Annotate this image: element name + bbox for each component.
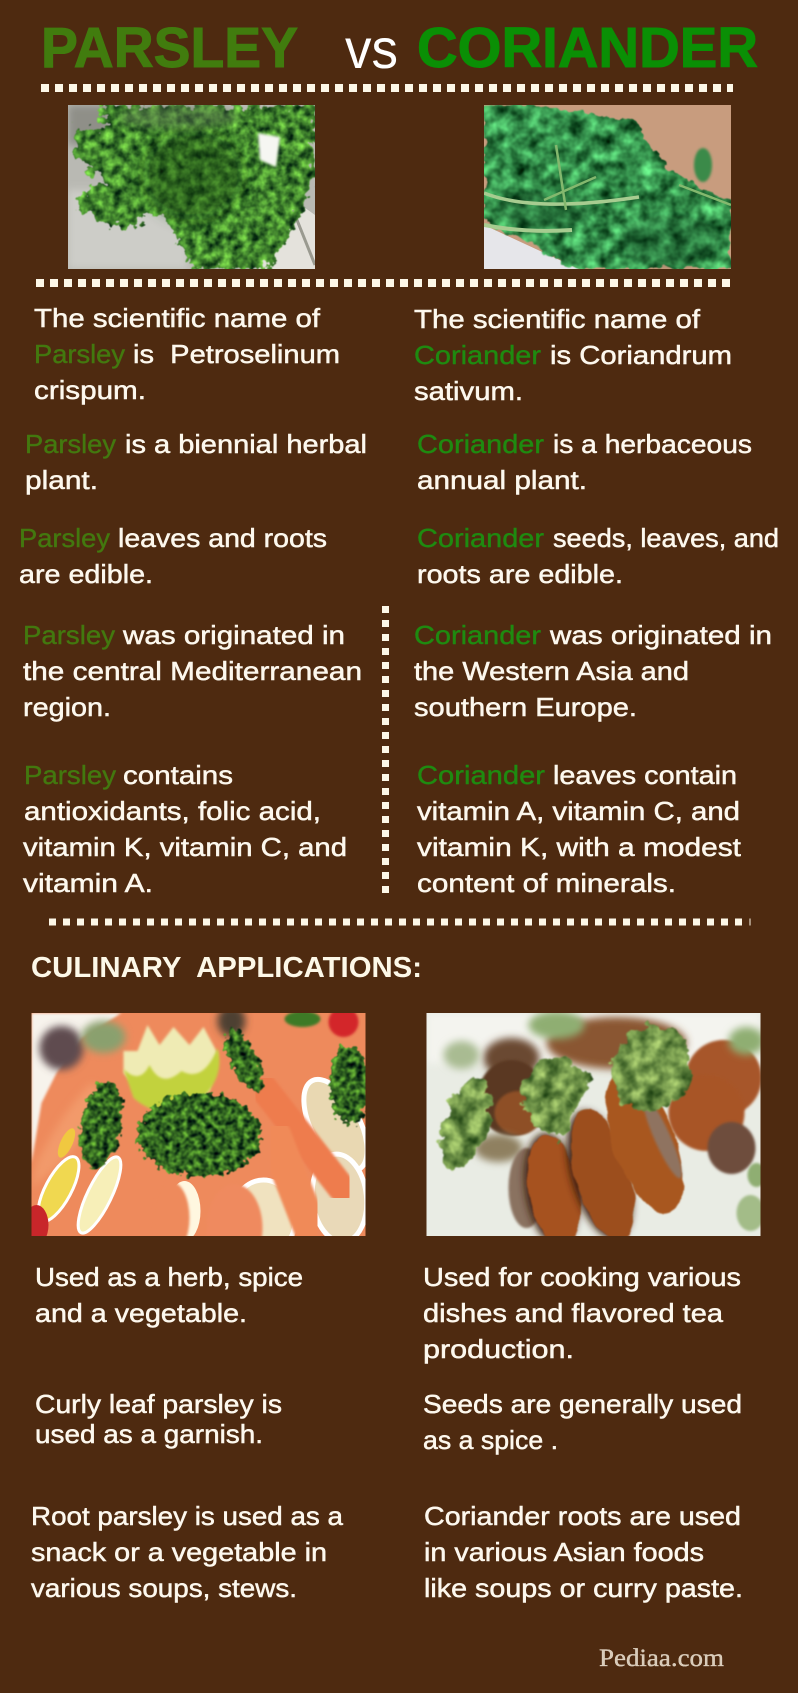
fact: coriander annual	[417, 429, 752, 495]
fact: coriander scientific name: Coriander	[414, 340, 541, 370]
use: garnish: used as a garnish.	[35, 1419, 263, 1449]
photo: glazed chicken with coriander	[426, 1011, 766, 1250]
fact: coriander nutrients	[417, 760, 742, 898]
fact: coriander nutrients: vitamin K, with a modest	[417, 832, 742, 862]
fact: coriander nutrients: content of minerals.	[417, 868, 676, 898]
fact: coriander origin: the Western Asia and	[414, 656, 689, 686]
use: herb, spice, vegetable	[35, 1262, 303, 1328]
fact: coriander origin: was originated in	[549, 620, 772, 650]
fact: parsley origin	[23, 620, 362, 722]
use: cooking and tea: dishes and flavored tea	[423, 1298, 724, 1328]
fact: parsley biennial: plant.	[25, 465, 98, 495]
fact: coriander edible parts: seeds, leaves, and	[553, 523, 779, 553]
fact: parsley origin: region.	[23, 692, 111, 722]
heading: culinary applications: CULINARY APPLICATIONS:	[31, 952, 422, 984]
fact: parsley nutrients	[23, 760, 347, 898]
source credit: Pediaa.com: Pediaa.com	[599, 1645, 725, 1672]
use: cooking and tea	[423, 1262, 741, 1364]
fact: parsley edible parts: are edible.	[19, 559, 153, 589]
title	[41, 16, 758, 80]
fact: parsley biennial: Parsley	[25, 429, 116, 459]
right culinary uses	[423, 1262, 743, 1603]
fact: coriander nutrients: vitamin A, vitamin C, and	[417, 796, 740, 826]
fact: parsley scientific name	[34, 303, 340, 405]
photo: parsley plant	[68, 105, 315, 269]
fact: parsley nutrients: vitamin K, vitamin C, and	[23, 832, 347, 862]
fact: parsley nutrients: antioxidants, folic acid,	[24, 796, 321, 826]
use: coriander roots: in various Asian foods	[424, 1537, 704, 1567]
fact: parsley scientific name: is Petroselinum	[133, 339, 340, 369]
fact: coriander origin: southern Europe.	[414, 692, 637, 722]
use: cooking and tea: production.	[423, 1334, 574, 1364]
photo: salmon with parsley garnish	[32, 1013, 366, 1236]
fact: coriander edible parts: Coriander	[417, 523, 544, 553]
use: coriander roots	[424, 1501, 743, 1603]
fact: coriander edible parts	[417, 523, 779, 589]
left column facts	[19, 303, 367, 898]
use: seeds as spice: Seeds are generally used	[423, 1389, 742, 1419]
fact: parsley edible parts	[19, 523, 327, 589]
fact: coriander nutrients: leaves contain	[553, 760, 737, 790]
fact: coriander origin: Coriander	[414, 620, 541, 650]
fact: parsley scientific name: crispum.	[34, 375, 146, 405]
use: root parsley	[31, 1501, 344, 1603]
use: seeds as spice: as a spice .	[423, 1425, 558, 1455]
use: herb, spice, vegetable: and a vegetable.	[35, 1298, 247, 1328]
fact: parsley scientific name: The scientific name of	[34, 303, 321, 333]
fact: parsley nutrients: Parsley	[24, 760, 116, 790]
use: herb, spice, vegetable: Used as a herb, spice	[35, 1262, 303, 1292]
use: garnish: Curly leaf parsley is	[35, 1389, 282, 1419]
fact: coriander nutrients: Coriander	[417, 760, 545, 790]
use: seeds as spice	[423, 1389, 742, 1455]
use: root parsley: snack or a vegetable in	[31, 1537, 327, 1567]
fact: coriander origin	[414, 620, 772, 722]
use: root parsley: Root parsley is used as a	[31, 1501, 344, 1531]
left culinary uses	[31, 1262, 344, 1603]
fact: parsley nutrients: vitamin A.	[23, 868, 153, 898]
use: coriander roots: Coriander roots are used	[424, 1501, 741, 1531]
fact: parsley edible parts: leaves and roots	[118, 523, 327, 553]
lemon slices	[37, 1076, 366, 1236]
fact: coriander edible parts: roots are edible.	[417, 559, 623, 589]
right column facts	[414, 304, 779, 898]
use: cooking and tea: Used for cooking various	[423, 1262, 741, 1292]
fact: parsley nutrients: contains	[123, 760, 233, 790]
use: root parsley: various soups, stews.	[31, 1573, 297, 1603]
use: coriander roots: like soups or curry paste.	[424, 1573, 743, 1603]
fact: parsley origin: the central Mediterranean	[23, 656, 362, 686]
title word: Coriander: CORIANDER	[417, 16, 758, 80]
fact: coriander scientific name: The scientific name of	[414, 304, 701, 334]
fact: coriander scientific name: sativum.	[414, 376, 523, 406]
use: garnish	[35, 1389, 282, 1449]
title word: vs: vs	[345, 17, 398, 80]
fact: parsley edible parts: Parsley	[19, 523, 110, 553]
fact: parsley scientific name: Parsley	[34, 339, 125, 369]
fact: parsley origin: Parsley	[23, 620, 115, 650]
fact: coriander annual: is a herbaceous	[553, 429, 752, 459]
fact: parsley biennial	[25, 429, 367, 495]
fact: coriander scientific name	[414, 304, 732, 406]
fact: parsley origin: was originated in	[122, 620, 345, 650]
photo: coriander leaves	[484, 105, 731, 269]
fact: coriander scientific name: is Coriandrum	[550, 340, 732, 370]
title word: Parsley: PARSLEY	[41, 16, 298, 80]
fact: coriander annual: annual plant.	[417, 465, 587, 495]
fact: parsley biennial: is a biennial herbal	[125, 429, 367, 459]
fact: coriander annual: Coriander	[417, 429, 544, 459]
